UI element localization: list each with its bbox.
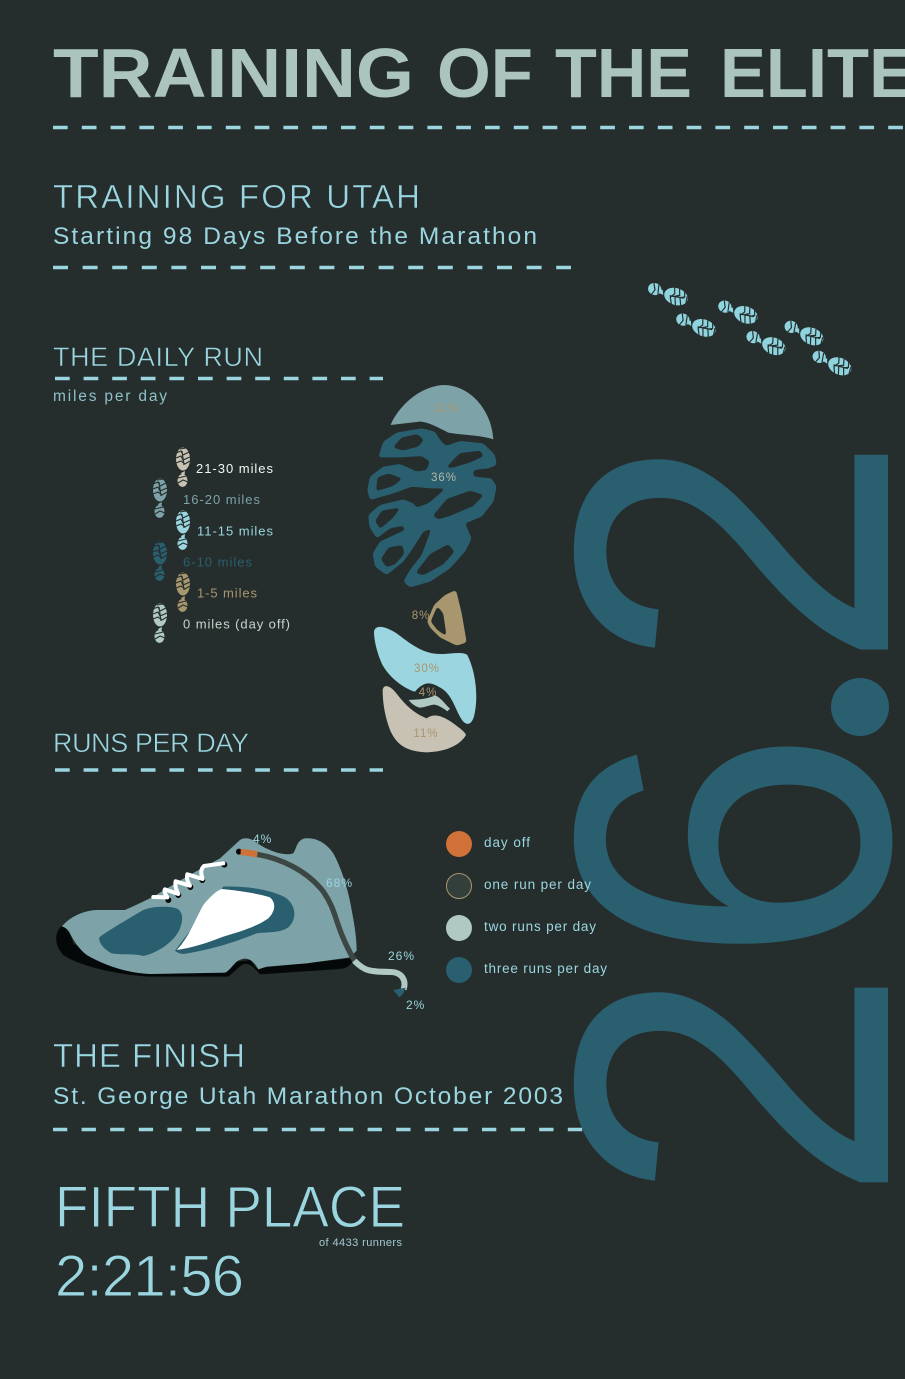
shoe percentages	[253, 832, 425, 1012]
result: fifth place: FIFTH PLACE	[55, 1175, 405, 1240]
shoe side swoosh	[175, 887, 294, 954]
result: fifth place: 2:21:56	[55, 1244, 244, 1309]
title: TRAINING	[53, 34, 414, 112]
shoe upper	[62, 838, 357, 974]
sole percentages: 11%	[413, 728, 439, 740]
shoe percentages: 4%	[253, 832, 272, 846]
legend: runs per day: three runs per day	[484, 961, 607, 976]
heading: the finish	[53, 1037, 563, 1110]
sole segment 11% bottom	[383, 686, 466, 752]
heading: the daily run	[53, 342, 263, 405]
result: fifth place: of 4433 runners	[319, 1237, 402, 1249]
sole percentages: 30%	[414, 663, 440, 675]
footprints trail	[646, 280, 854, 379]
legend: miles per day	[153, 448, 290, 643]
sole segment 8%	[427, 590, 467, 646]
legend: miles per day: 21-30 miles	[196, 461, 274, 476]
shoe laces	[153, 862, 227, 903]
shoe toe patch	[99, 907, 182, 956]
heading: training for utah: TRAINING FOR UTAH	[53, 178, 420, 215]
legend: miles per day: 6-10 miles	[183, 554, 252, 570]
heading: the daily run: miles per day	[53, 388, 167, 405]
result: fifth place	[55, 1175, 405, 1309]
title: OF	[437, 34, 533, 112]
heading: runs per day: RUNS PER DAY	[53, 728, 249, 758]
chart: running shoe	[56, 832, 425, 1012]
shoe percentages: 2%	[406, 998, 425, 1012]
sole segment 11% top	[391, 385, 493, 439]
heading: the daily run: THE DAILY RUN	[53, 342, 263, 372]
lace segment: day off 4%	[236, 849, 257, 855]
heading: training for utah	[53, 178, 537, 250]
lace segment: three runs 2%	[393, 988, 406, 997]
legend: runs per day: one run per day	[484, 877, 591, 892]
shoe sole black	[56, 926, 353, 977]
sole segment 4%	[409, 695, 450, 711]
lace segment: one run 68%	[257, 854, 355, 962]
sole percentages: 36%	[431, 472, 457, 484]
sole segment 30%	[374, 627, 476, 724]
legend: miles per day: 16-20 miles	[183, 492, 260, 507]
chart: shoe sole	[367, 385, 497, 752]
sole percentages: 11%	[433, 403, 459, 415]
shoe white panel	[177, 889, 274, 950]
shoe percentages: 26%	[388, 949, 415, 963]
sole segment 36%	[367, 428, 497, 587]
heading: the finish: St. George Utah Marathon October 2003	[53, 1083, 563, 1110]
legend: runs per day: two runs per day	[484, 919, 596, 934]
big rotated number 26.2	[482, 433, 905, 1204]
legend: runs per day: day off	[484, 835, 530, 850]
legend: miles per day: 11-15 miles	[197, 524, 274, 538]
legend: miles per day: 1-5 miles	[197, 586, 258, 600]
sole percentages: 8%	[412, 610, 430, 622]
shoe percentages: 68%	[326, 876, 353, 890]
legend: runs per day	[446, 831, 607, 983]
title: THE	[555, 34, 692, 112]
sole percentages: 4%	[419, 687, 437, 699]
title	[53, 34, 905, 112]
sole percentages	[412, 403, 459, 740]
lace segment: two runs 26%	[354, 961, 404, 989]
legend: miles per day: 0 miles (day off)	[183, 616, 290, 632]
heading: training for utah: Starting 98 Days Before the Marathon	[53, 223, 537, 250]
heading: the finish: THE FINISH	[53, 1037, 245, 1074]
